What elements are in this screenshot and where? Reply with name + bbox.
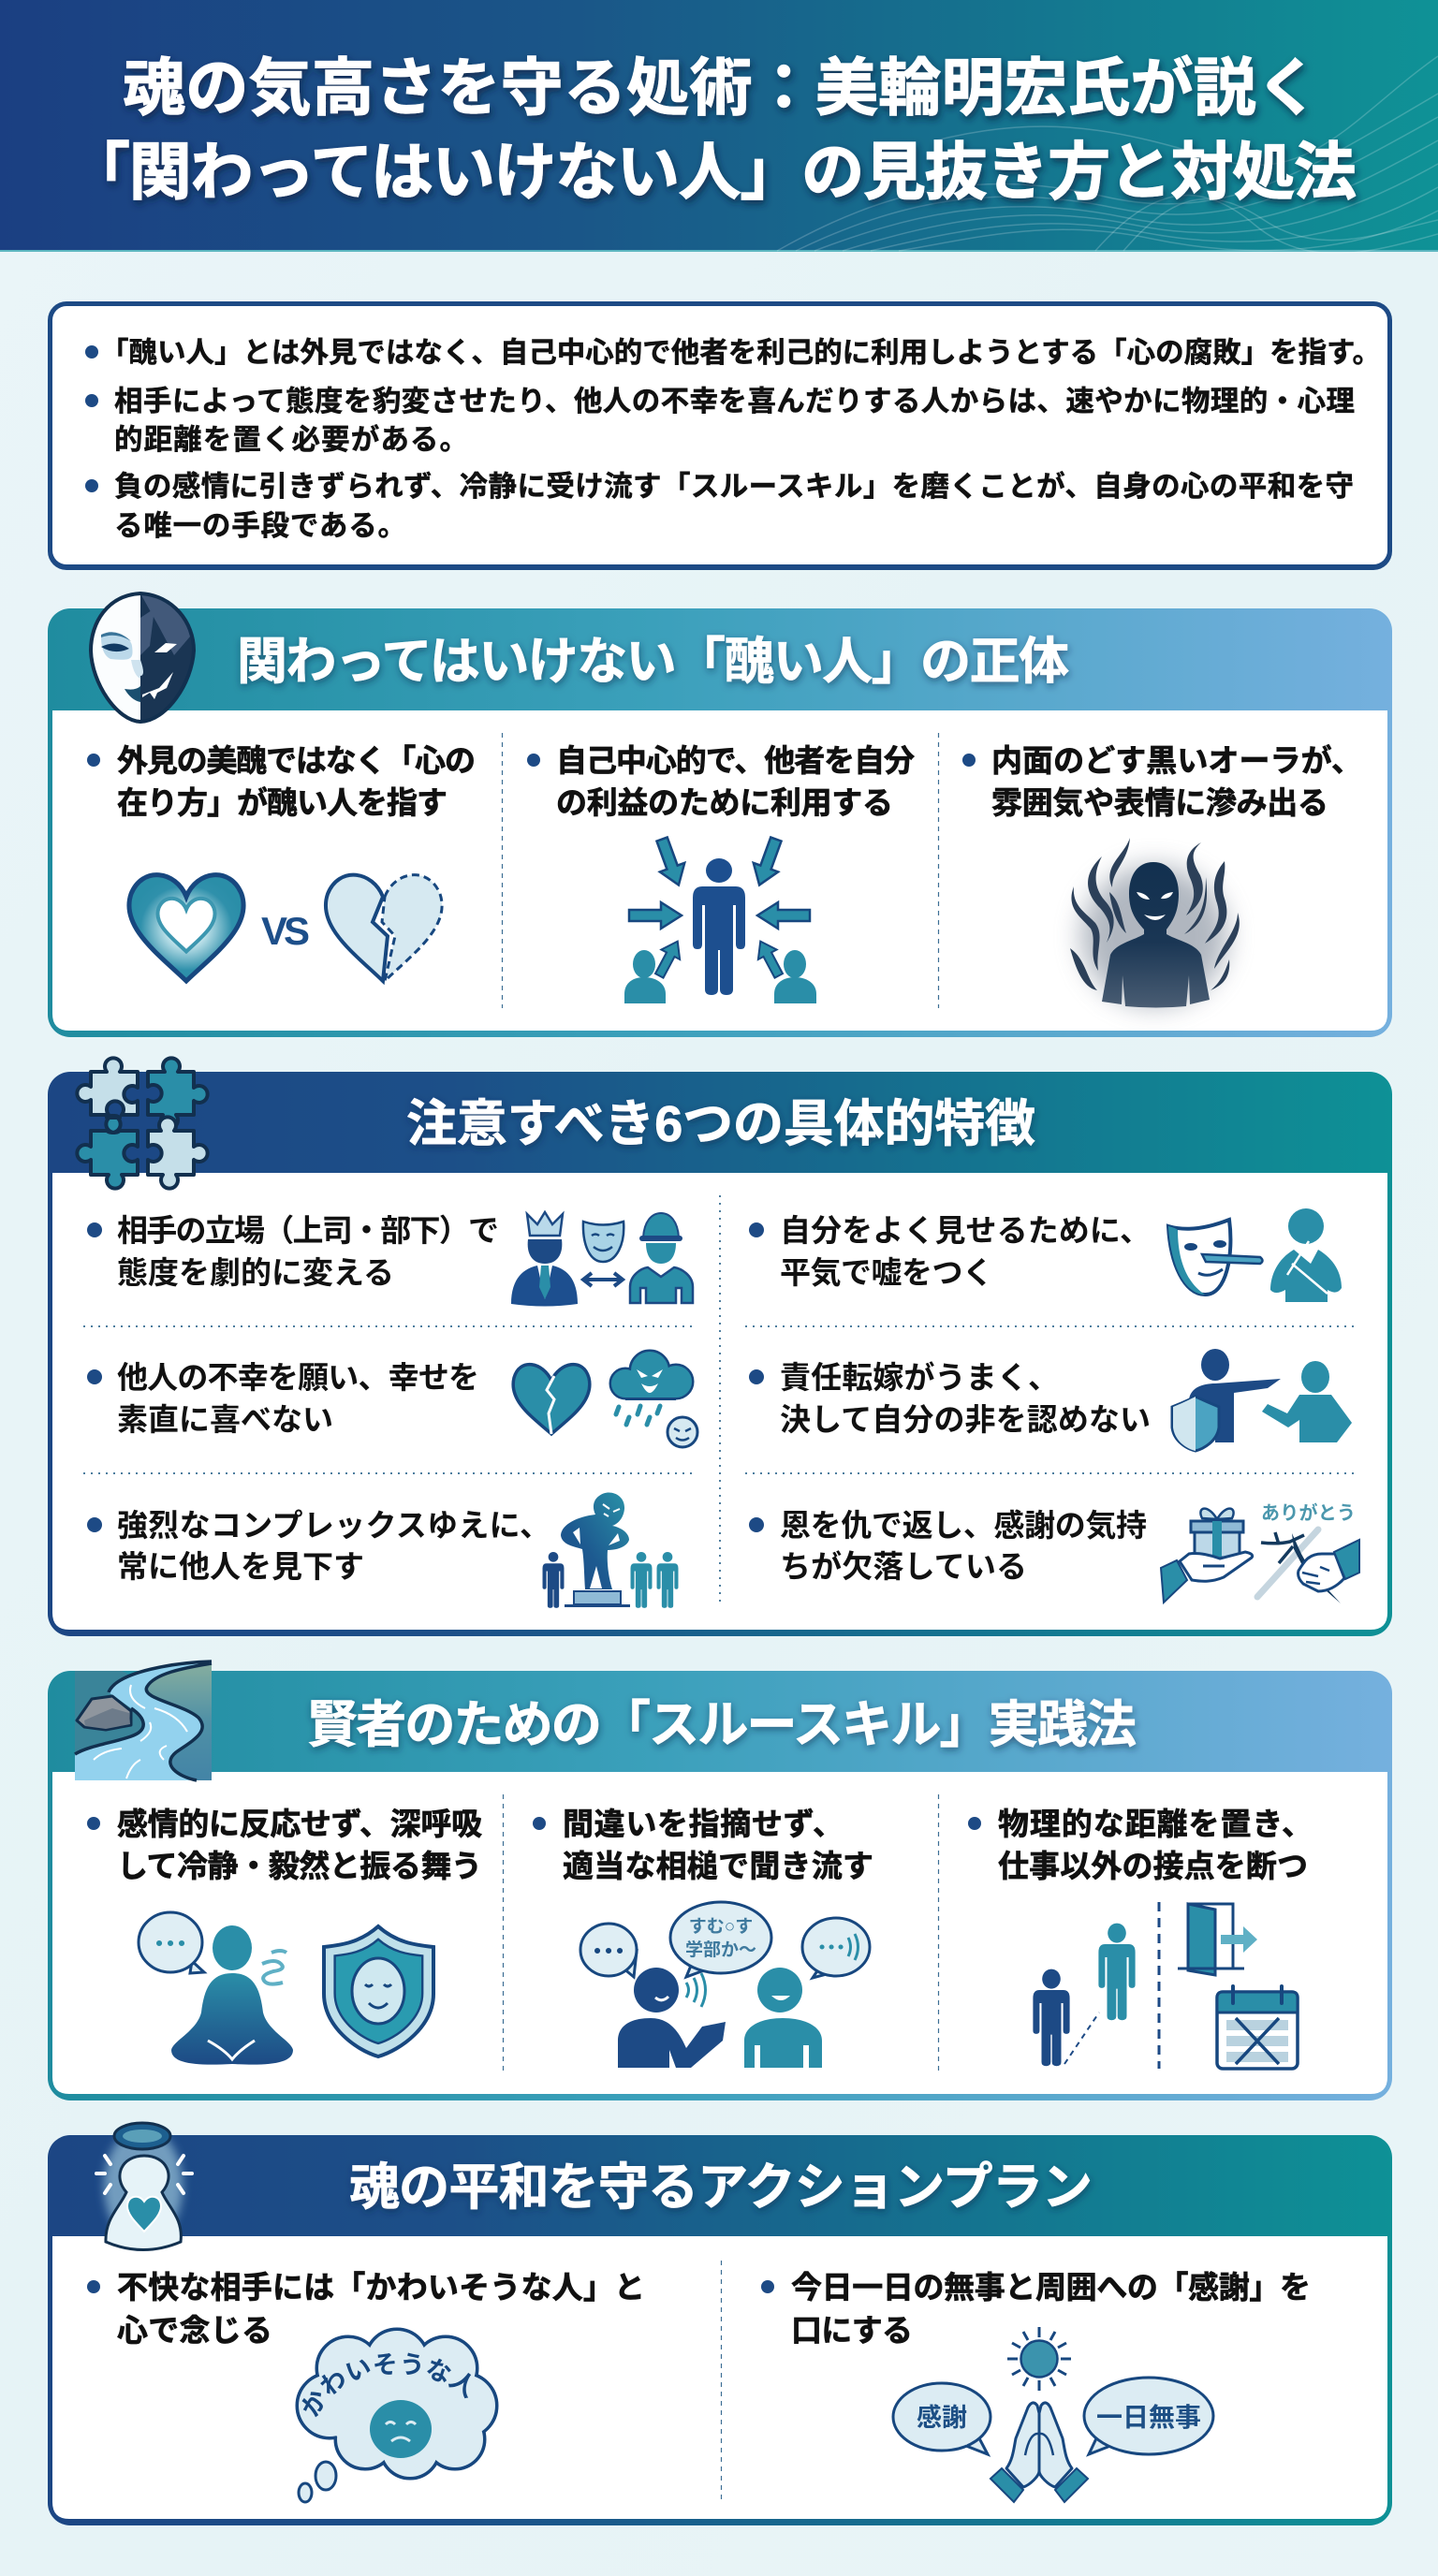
heading: 魂の平和を守るアクションプラン [349,2159,1093,2216]
bullets: 心で念じる [117,2313,272,2348]
bullets [87,1807,1313,1883]
bullets [87,2270,1311,2348]
panel: summary [48,301,1392,570]
icon: distance, door and calendar [1033,1902,1298,2069]
icon: blaming person with shield [1172,1349,1352,1451]
bullets: 物理的な距離を置き、 [998,1807,1313,1841]
icon: gift and thorn [1161,1501,1359,1603]
icon: meditation and shield [139,1912,433,2065]
icon: people chatting: すむ○す [689,1916,753,1937]
bullets [87,743,1362,820]
panel: through skill practice [48,1661,1392,2100]
bullets: 在り方」が醜い人を指す [117,785,448,820]
bullets: right column: 自分をよく見せるために、 [780,1213,1151,1248]
panel: summary: 負の感情に引きずられず、冷静に受け流す「スルースキル」を磨くことが、自身の心の平和を守 [114,470,1354,503]
bullets: right column: ちが欠落している [780,1549,1027,1584]
icon: puzzle pieces [77,1058,208,1189]
panel: summary: る唯一の手段である。 [114,510,406,542]
panel: ugly people identity [48,593,1392,1037]
bullets: 内面のどす黒いオーラが、 [991,743,1362,778]
bullets: 間違いを指摘せず、 [563,1807,844,1841]
bullets: して冷静・毅然と振る舞う [117,1849,482,1883]
bullets: 不快な相手には「かわいそうな人」と [117,2270,645,2305]
icon: thought cloud [296,2327,498,2503]
bullets: right column: 決して自分の非を認めない [780,1402,1151,1437]
title: 魂の気高さを守る処術：美輪明宏氏が説く [123,53,1319,124]
icon: lying mask and person [1168,1208,1342,1302]
icon: dark aura figure [1070,838,1240,1007]
icon: sun, speech bubbles and praying hands [893,2327,1213,2502]
icon: person surrounded by arrows [624,835,816,1003]
icon: sun, speech bubbles and praying hands: 一日無事 [1096,2403,1201,2432]
bullets: right column: 恩を仇で返し、感謝の気持 [780,1508,1147,1543]
bullets: right column: 平気で嘘をつく [780,1255,993,1290]
bullets: left column: 他人の不幸を願い、幸せを [117,1360,479,1395]
icon: broken heart and cloud [513,1351,697,1447]
icon: halo figure with heart [96,2123,192,2250]
bullets: 外見の美醜ではなく「心の [117,743,476,778]
panel: summary: 「醜い人」とは外見ではなく、自己中心的で他者を利己的に利用しようとする「心の腐敗」を指す。 [100,337,1381,369]
bullets: 雰囲気や表情に滲み出る [991,785,1328,820]
icon: people chatting: 学部か〜 [685,1939,756,1960]
bullets: 仕事以外の接点を断つ [998,1849,1308,1883]
icon: heart vs broken heart [129,875,442,981]
icon: sun, speech bubbles and praying hands: 感謝 [917,2404,967,2432]
page header [0,0,1438,254]
bullets: left column: 素直に喜べない [117,1402,333,1437]
panel: summary: 的距離を置く必要がある。 [114,423,468,456]
bullets: left column [87,1213,550,1584]
title: 「関わってはいけない人」の見抜き方と対処法 [67,138,1357,208]
icon: gift and thorn: ありがとう [1261,1501,1356,1524]
panel: six characteristics [48,1058,1392,1636]
heading: 賢者のための「スルースキル」実践法 [307,1697,1137,1753]
bullets: 今日一日の無事と周囲への「感謝」を [791,2270,1311,2305]
icon: thought cloud: かわいそうな人 [301,2353,472,2417]
bullets: 適当な相槌で聞き流す [563,1849,873,1883]
bullets: right column: 責任転嫁がうまく、 [780,1360,1059,1395]
bullets: left column: 相手の立場（上司・部下）で [117,1213,499,1248]
bullets: left column: 常に他人を見下す [117,1549,364,1584]
bullets: 自己中心的で、他者を自分 [556,743,915,778]
heading: 関わってはいけない「醜い人」の正体 [237,634,1069,690]
icon: half mask [91,593,194,722]
bullets: の利益のために利用する [556,785,893,820]
bullets: 感情的に反応せず、深呼吸 [117,1807,482,1841]
icon: river and rock [75,1661,212,1780]
title [67,53,1357,208]
panel: action plan [48,2121,1392,2525]
icon: boss mask worker [511,1212,693,1307]
heading: 注意すべき6つの具体的特徴 [406,1096,1035,1152]
icon: heart vs broken heart: VS [261,909,310,953]
panel: summary: 相手によって態度を豹変させたり、他人の不幸を喜んだりする人からは、速やかに物理的・心理 [114,386,1355,417]
icon: people chatting [580,1902,870,2068]
bullets: left column: 態度を劇的に変える [117,1255,394,1290]
bullets: right column [749,1213,1151,1584]
bullets: 口にする [791,2313,913,2348]
icon: statue looking down [543,1492,678,1608]
bullets: left column: 強烈なコンプレックスゆえに、 [117,1508,550,1543]
